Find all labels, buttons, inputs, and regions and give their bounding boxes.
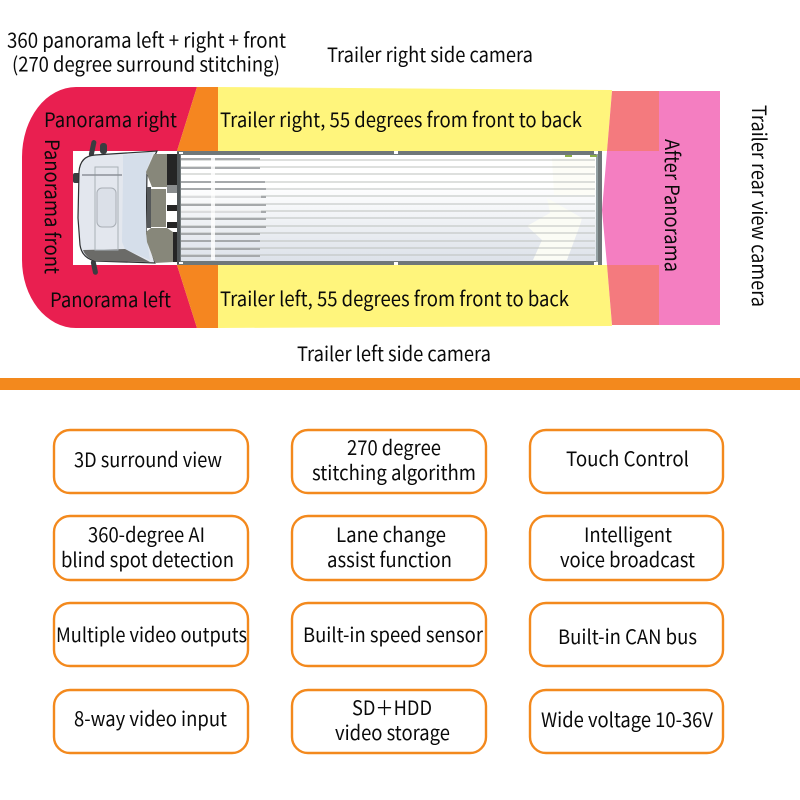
zone label: after panorama: After Panorama xyxy=(659,139,688,272)
label: trailer rear view camera: Trailer rear view camera xyxy=(746,105,775,307)
feature: multiple video outputs xyxy=(54,603,248,666)
feature: 270 degree stitching: stitching algorithm xyxy=(312,457,476,486)
heading: panorama stitching label: 360 panorama left + right + front xyxy=(7,24,286,54)
feature: 3D surround view xyxy=(54,430,248,493)
trailer pale markings xyxy=(527,198,582,260)
zone label: panorama front: Panorama front xyxy=(39,139,68,274)
cab xyxy=(78,151,157,263)
feature: speed sensor: Built-in speed sensor xyxy=(303,619,483,648)
feature: lane change xyxy=(292,516,486,580)
feature: wide voltage: Wide voltage 10-36V xyxy=(541,704,713,733)
trailer xyxy=(179,153,600,263)
heading: panorama stitching label xyxy=(7,24,286,78)
divider band xyxy=(0,378,800,390)
zone: front-side overlap orange top xyxy=(177,87,218,151)
label: trailer right side camera: Trailer right side camera xyxy=(327,39,533,68)
feature: video input: 8-way video input xyxy=(74,703,227,732)
trailer markers xyxy=(179,151,598,265)
zone: rear pink xyxy=(602,91,720,325)
zone label: trailer right: Trailer right, 55 degrees from front to back xyxy=(220,104,582,133)
feature: 3D surround view: 3D surround view xyxy=(74,444,222,473)
chassis olive xyxy=(146,154,167,187)
mirrors xyxy=(73,140,107,275)
feature: blind spot detection: 360-degree AI xyxy=(88,519,205,548)
zone: panorama red xyxy=(22,87,197,328)
feature: video storage: video storage xyxy=(335,717,450,746)
zone label: panorama right: Panorama right xyxy=(44,104,177,133)
trailer slats xyxy=(181,160,595,255)
feature: lane change: assist function xyxy=(327,544,452,573)
zone: rear overlap salmon bottom xyxy=(607,265,659,325)
coverage diagram xyxy=(22,87,720,328)
feature: blind spot detection: blind spot detection xyxy=(61,544,234,573)
heading: panorama stitching label: (270 degree surround stitching) xyxy=(12,48,280,78)
zone label: trailer left: Trailer left, 55 degrees from front to back xyxy=(220,283,569,312)
chassis black xyxy=(167,154,177,185)
feature: speed sensor xyxy=(292,603,486,666)
label: trailer left side camera: Trailer left side camera xyxy=(297,338,491,367)
feature: multiple video outputs: Multiple video outputs xyxy=(56,619,247,648)
feature: video storage xyxy=(292,690,486,753)
feature: blind spot detection xyxy=(54,516,248,580)
feature: 270 degree stitching xyxy=(292,430,486,493)
feature: wide voltage xyxy=(530,690,723,753)
truck backing xyxy=(73,151,183,265)
feature: voice broadcast: Intelligent xyxy=(584,519,672,548)
feature: voice broadcast: voice broadcast xyxy=(560,544,695,573)
trailer front shading xyxy=(181,159,266,256)
zone: rear overlap salmon top xyxy=(607,91,659,151)
trailer highlight gaps xyxy=(181,156,261,260)
zone: trailer right yellow xyxy=(218,87,612,151)
feature: CAN bus xyxy=(530,603,723,666)
feature: CAN bus: Built-in CAN bus xyxy=(558,621,697,650)
feature: lane change: Lane change xyxy=(336,519,446,548)
feature: video storage: SD＋HDD xyxy=(352,692,432,721)
feature: voice broadcast xyxy=(530,516,723,580)
feature: video input xyxy=(54,690,248,753)
feature: 270 degree stitching: 270 degree xyxy=(347,432,441,461)
feature grid xyxy=(54,430,723,753)
feature: touch control xyxy=(530,430,723,493)
zone: front-side overlap orange bottom xyxy=(177,265,218,328)
zone label: panorama left: Panorama left xyxy=(50,284,171,313)
feature: touch control: Touch Control xyxy=(566,443,689,472)
zone: trailer left yellow xyxy=(218,265,612,328)
truck illustration xyxy=(73,140,600,275)
